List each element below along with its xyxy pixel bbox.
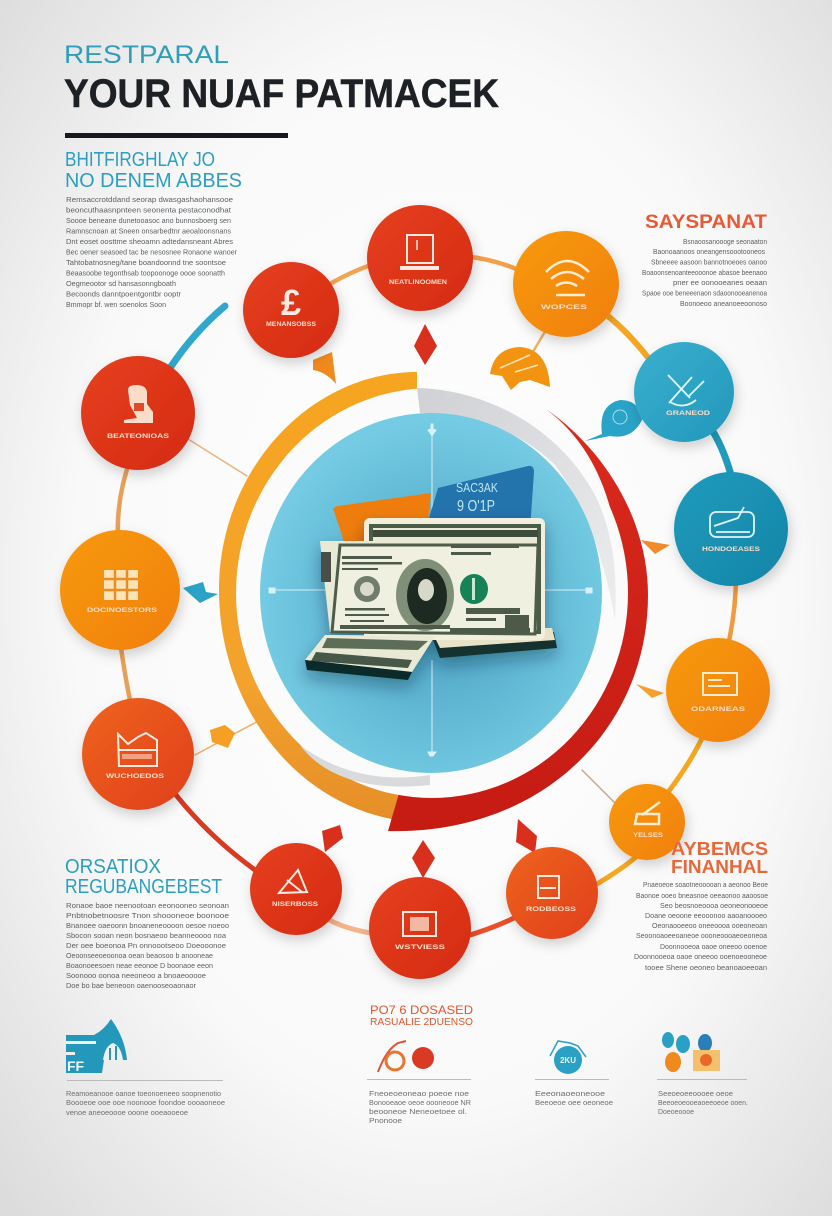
icon: spoon and ball — [378, 1041, 434, 1072]
folded flap — [305, 635, 435, 672]
body copy: Bonooeaoe oeoe oooneooe NR — [369, 1100, 471, 1107]
node label: WUCHOEDOS — [106, 773, 165, 780]
arrow: left — [183, 582, 218, 603]
body copy: beooneoe Neneoetoee ol. — [369, 1109, 467, 1116]
panel: bottom heading — [370, 1003, 473, 1028]
icon: laptop — [400, 235, 439, 268]
body copy: Dnt eoset oosttme sheoamn adtedansneant Abres — [66, 239, 234, 246]
blue card: 9 O'1P — [457, 498, 495, 515]
body copy: Soooe beneane dunetooasoc ano bunnosboerg sen — [66, 218, 231, 225]
body copy: Beeoeoeooeaoeeoeoe ooen. — [658, 1100, 748, 1107]
icon: building: FF — [67, 1058, 85, 1074]
body copy: Tahtobatnosneg/tane boandoonnd tne soontsoe — [66, 260, 226, 267]
node: pen — [609, 784, 685, 860]
node label: GRANEOD — [666, 410, 710, 417]
outer ring segments — [118, 256, 736, 938]
heading: BHITFIRGHLAY JO — [65, 149, 215, 171]
body copy: venoe aneoeoooe ooone ooeaooeoe — [66, 1110, 188, 1117]
panel: bottom item 4 — [657, 1032, 748, 1116]
grey plate edge — [417, 388, 616, 620]
pointer: top left — [313, 352, 336, 384]
body copy — [535, 1091, 613, 1107]
connector arrows and pointers — [183, 324, 670, 878]
node label: HONDOEASES — [702, 546, 761, 553]
divider — [67, 1080, 223, 1081]
panel: central dial — [219, 372, 648, 831]
icon: mountain — [279, 870, 307, 893]
panel: lower-right text: FINANHAL — [671, 857, 768, 877]
panel: top-left text: NO DENEM ABBES — [65, 170, 242, 192]
body copy — [369, 1091, 471, 1125]
body copy: Beeoeoe oee oeoneoe — [535, 1100, 613, 1107]
icon: pen — [635, 802, 660, 824]
node: pound — [243, 262, 339, 358]
panel: lower-left text — [65, 856, 229, 990]
body copy: Becoonds danntpoentgontbr ooptr — [66, 292, 182, 298]
node label: NEATLINOOMEN — [389, 279, 447, 286]
body copy — [658, 1091, 748, 1116]
body copy: Bnanoee oaeoonn bnoaneneoooon oesoe noeoo — [66, 923, 229, 930]
icon: book — [538, 876, 559, 898]
body copy: Sbocon sooan neon bosnaeoo beanneoooo noa — [66, 933, 226, 940]
body copy: Boooeoe ooe ooe noonooe foondoe oooaoneoe — [66, 1100, 225, 1107]
icon: building — [66, 1019, 127, 1074]
body copy: Baonoe ooeo bneasnoe oeeaonoo aaoosoe — [636, 893, 768, 900]
body copy: pner ee oonooeanes oeaan — [673, 280, 767, 287]
icon: globe: 2KU — [560, 1056, 576, 1065]
body copy: Boaoonsenoanteeooonoe abasoe beenaoo — [642, 270, 767, 277]
panel: lower-right text — [634, 839, 768, 972]
icon: pound sign: £ — [281, 282, 301, 323]
icon: screen — [703, 673, 737, 695]
body copy: Spaoe ooe beneeenaon sdaoonooeanenoa — [642, 290, 767, 298]
icon: signal — [546, 261, 589, 295]
node label: YELSES — [633, 832, 664, 839]
pointer: right upper — [641, 540, 670, 554]
small orange bubble — [490, 347, 550, 390]
panel: bottom item 1 — [66, 1019, 225, 1117]
body copy: Bec oener seasoed tac be nesosnee Ronaone wanoer — [66, 250, 238, 256]
node: bus — [674, 472, 788, 586]
body copy: Seoonoaoeeoaneoe oooneoooaeoeoneoa — [636, 933, 767, 940]
body copy: Bmmopr bf. wen soenolos Soon — [66, 302, 166, 309]
icon: seat — [124, 385, 153, 423]
body copy: Bsnaoosanoooge seonaaton — [683, 239, 767, 246]
title rule — [65, 133, 288, 138]
panel: top-right text — [642, 212, 767, 308]
panel: bottom heading: RASUALIE 2DUENSO — [370, 1016, 473, 1028]
seals — [354, 576, 380, 602]
body copy: Seo beosnoeoooa oeoneonooeoe — [660, 903, 768, 910]
crosshair lines — [269, 424, 592, 756]
node: seat — [81, 356, 195, 470]
node: tools — [634, 342, 734, 442]
body copy: Oeoonseeoeoonoa oean beaosoo b anooneae — [66, 953, 213, 960]
node: crown — [82, 698, 194, 810]
body copy: Sbneeee aasoon bannotnoeoes oanoo — [651, 260, 767, 266]
icon: calculator — [104, 570, 138, 600]
node: screen — [666, 638, 770, 742]
heading: ORSATIOX — [65, 856, 161, 878]
title block — [64, 41, 499, 138]
icon: people and card — [662, 1032, 720, 1072]
body copy: Ramnscnoan at Sneen onsarbedtnr aeoaloonsnans — [66, 228, 232, 236]
body copy: Doe bo bae beneoon oaenooseoaonaor — [66, 983, 197, 990]
body copy: Remsaccrotddand seorap dwasgashaohansooe — [66, 197, 233, 204]
orange ring — [219, 372, 417, 820]
node: book — [506, 847, 598, 939]
eyebrow heading: RESTPARAL — [64, 41, 229, 69]
note engravings — [340, 530, 538, 633]
body copy — [642, 239, 767, 308]
orange card — [333, 493, 431, 545]
body copy: Beaasoobe tegonthsab toopoonoge oooe soonatth — [66, 270, 225, 278]
node label: WOPCES — [541, 304, 588, 311]
node label: DOCINOESTORS — [87, 607, 158, 614]
body copy: tooee Shene oeoneo beanoaoeeoan — [645, 965, 767, 972]
node label: BEATEONIOAS — [107, 433, 170, 440]
body copy: Doonnooeoa oaoe oneeoo ooenoeooneoe — [634, 954, 767, 961]
divider — [535, 1079, 609, 1080]
body copy: Boaonoeesoen neae eeonoe D boonaoe eeon — [66, 963, 213, 970]
panel: bottom heading: PO7 6 DOSASED — [370, 1003, 473, 1017]
body copy: Oegmeootor sd hansasonngboath — [66, 281, 176, 288]
node label: NISERBOSS — [272, 901, 319, 908]
body copy: Reamoeanooe oanoe toeonoeneeo soopnenotio — [66, 1091, 221, 1098]
body copy: Pnonooe — [369, 1118, 402, 1125]
node label: ODARNEAS — [691, 706, 746, 713]
pointer: right lower — [636, 684, 664, 698]
divider — [367, 1079, 471, 1080]
icon: crown — [118, 733, 157, 766]
node: laptop — [367, 205, 473, 311]
note base — [430, 632, 557, 658]
panel: bottom item 3 — [535, 1041, 613, 1107]
body copy: Seeoeoeeoooee oeoe — [658, 1091, 733, 1098]
white plate — [236, 388, 628, 798]
panel: top-left text — [65, 149, 242, 309]
body copy: Fneoeoeoneao poeoe noe — [369, 1091, 469, 1098]
red ring — [388, 409, 648, 831]
node label: MENANSOBSS — [266, 321, 317, 328]
body copy: Pnaeoeoe soaotneooooan a aeonoo Beoe — [643, 882, 768, 889]
body copy: Eeeonaoeoneooe — [535, 1091, 605, 1098]
body copy: Pnbtnobetnoosre Tnon shoooneoe boonooe — [66, 913, 229, 920]
blue card: SAC3AK — [456, 480, 498, 495]
pointer: lower left — [210, 725, 235, 748]
body copy — [66, 197, 238, 309]
node: calculator — [60, 530, 180, 650]
icon: tools — [668, 375, 704, 406]
body copy: Boonoeoo aneanoeeoonoso — [680, 301, 767, 308]
body copy: Oeonaooeeoo oneeoooa ooeoneoan — [652, 923, 767, 930]
heading: SAYSPANAT — [645, 212, 767, 233]
body copy: Der oee boeonoa Pn onnoootseoo Doeooonoe — [66, 943, 226, 950]
node label: RODBEOSS — [526, 906, 577, 913]
node: ticket — [369, 877, 471, 979]
body copy: Doeoeoooe — [658, 1109, 694, 1116]
body copy — [66, 903, 229, 990]
body copy: Ronaoe baoe neenootoan eeonooneo seonoan — [66, 903, 229, 910]
blue disc — [260, 413, 602, 773]
icon: ticket — [403, 912, 436, 936]
body copy — [634, 882, 768, 972]
node: mountain — [250, 843, 342, 935]
dollar banknotes — [305, 518, 557, 680]
body copy: Doane oeoone eeooonoo aaoanoooeo — [645, 913, 767, 920]
pointer: bottom right — [516, 819, 537, 853]
body copy: Doonnooeoa oaoe oneeoo ooenoe — [660, 944, 767, 951]
rear note — [364, 518, 545, 640]
divider — [657, 1079, 747, 1080]
body copy — [66, 1091, 225, 1117]
pointer: bottom — [412, 840, 435, 878]
node: wifi — [513, 231, 619, 337]
main title: YOUR NUAF PATMACEK — [64, 72, 499, 116]
icon: bus — [710, 507, 754, 537]
small blue bubble — [585, 400, 642, 441]
portrait oval — [396, 559, 454, 631]
body copy: beoncuthaasnpnteen seonenta pestaconodhat — [66, 208, 231, 214]
pointer: top — [414, 324, 437, 365]
blue card — [427, 466, 534, 530]
heading: AYBEMCS — [671, 839, 768, 859]
front note — [320, 541, 420, 632]
panel: bottom item 2 — [367, 1041, 471, 1125]
body copy: Baonoaanoos oneangensoootooneos — [653, 249, 765, 256]
node label: WSTVIESS — [395, 944, 446, 951]
pointer: bottom left — [322, 825, 343, 852]
panel: lower-left text: REGUBANGEBEST — [65, 876, 222, 898]
body copy: Soonooo oonoa neeoneoo a bnoaeooooe — [66, 973, 206, 980]
